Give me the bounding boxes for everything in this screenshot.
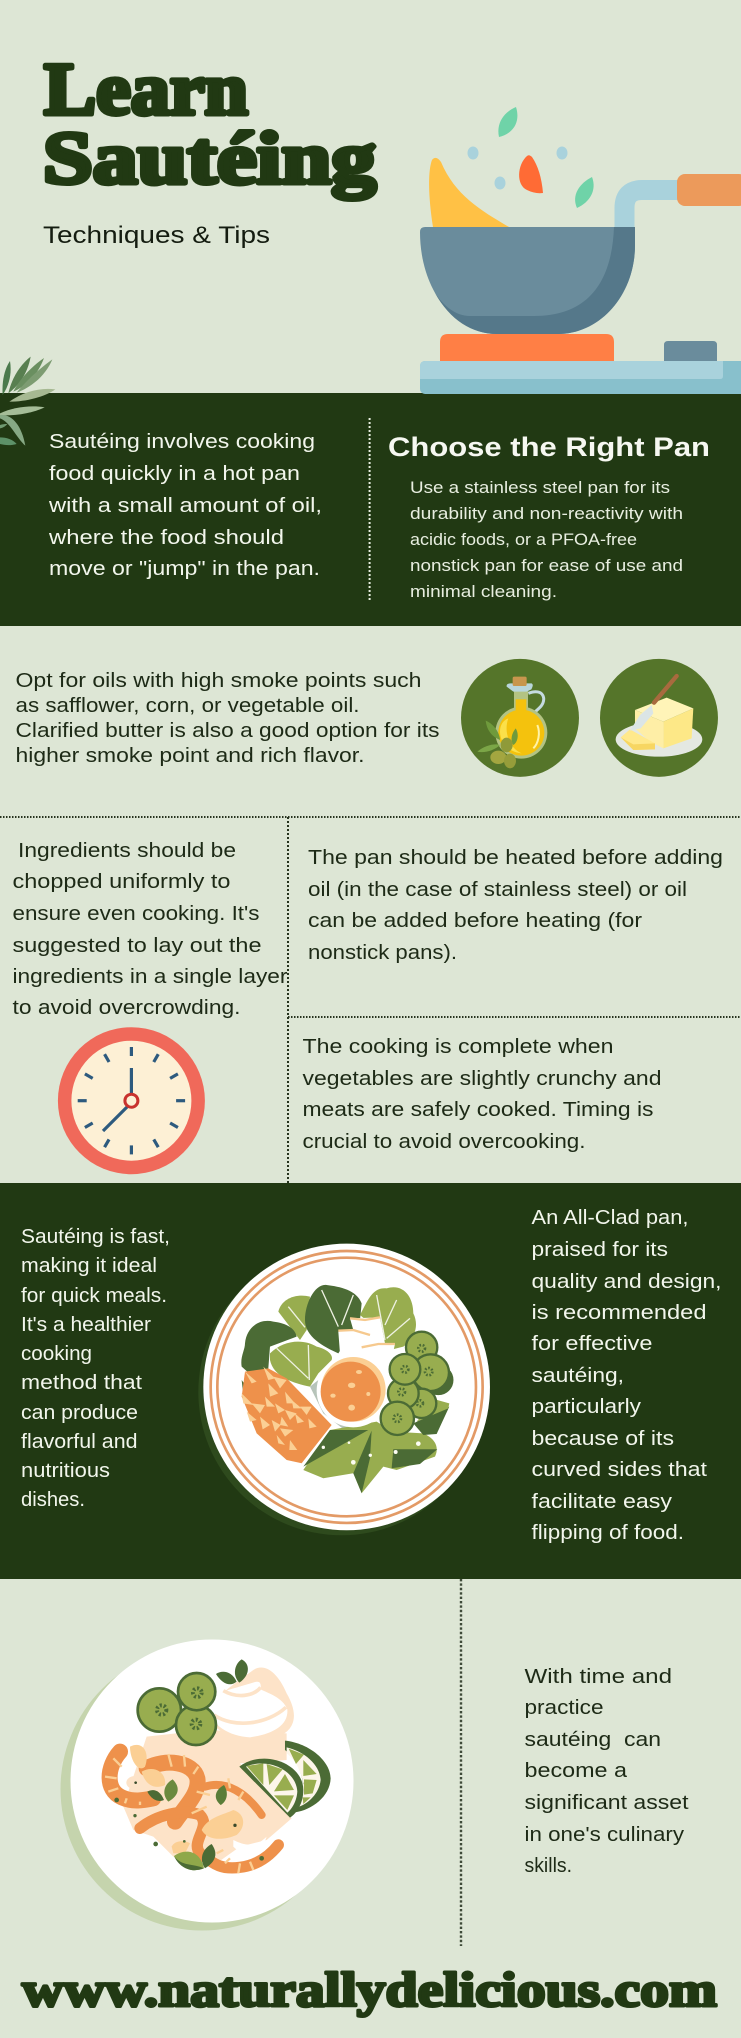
text block: All-Clad recommendation bbox=[532, 1207, 722, 1544]
text block: pan advice: durability and non-reactivity with bbox=[410, 504, 683, 523]
text block: definition of sautéing: food quickly in a hot pan bbox=[49, 463, 300, 485]
dotted grid dividers bbox=[0, 817, 741, 1183]
text block: All-Clad recommendation: curved sides that bbox=[532, 1459, 708, 1481]
text block: All-Clad recommendation: because of its bbox=[532, 1428, 674, 1450]
icon: butter on a plate bbox=[600, 659, 718, 777]
text block: oil choice: as safflower, corn, or vegetable oil. bbox=[16, 695, 360, 717]
text block: closing note: With time and bbox=[524, 1666, 672, 1688]
text block: pan advice: acidic foods, or a PFOA-free bbox=[410, 530, 637, 549]
text block: benefits of sautéing: cooking bbox=[21, 1343, 92, 1365]
text block: ingredients: ensure even cooking. It's bbox=[12, 903, 260, 925]
text block: All-Clad recommendation: flipping of food. bbox=[532, 1522, 684, 1544]
text block: benefits of sautéing: method that bbox=[21, 1372, 143, 1394]
text block: benefits of sautéing: dishes. bbox=[21, 1489, 85, 1511]
text block: definition of sautéing: where the food should bbox=[48, 527, 284, 549]
panel: intro band background bbox=[0, 393, 741, 626]
title bbox=[43, 49, 376, 200]
title: Sautéing bbox=[43, 118, 376, 200]
text block: oil choice bbox=[16, 670, 440, 767]
text block: heating the pan: can be added before heating (for bbox=[308, 910, 642, 932]
text block: doneness and timing: crucial to avoid overcooking. bbox=[302, 1131, 586, 1153]
icon: olive oil bottle bbox=[461, 659, 579, 777]
text block: definition of sautéing bbox=[48, 431, 322, 580]
text block: All-Clad recommendation: for effective bbox=[532, 1333, 652, 1355]
text block: doneness and timing: vegetables are slightly crunchy and bbox=[302, 1068, 662, 1090]
text block: All-Clad recommendation: praised for its bbox=[532, 1239, 668, 1261]
text block: doneness and timing: meats are safely cooked. Timing is bbox=[302, 1099, 654, 1121]
text block: heating the pan bbox=[308, 847, 723, 964]
text block: doneness and timing: The cooking is complete when bbox=[302, 1036, 614, 1058]
panel: second dark band background bbox=[0, 1183, 741, 1579]
text block: pan advice: minimal cleaning. bbox=[410, 582, 557, 601]
text block: oil choice: Clarified butter is also a good option for its bbox=[16, 720, 440, 742]
text block: oil choice: higher smoke point and rich flavor. bbox=[16, 745, 364, 767]
heading: choose the right pan: Choose the Right Pan bbox=[388, 432, 710, 462]
text block: ingredients: to avoid overcrowding. bbox=[12, 997, 240, 1019]
text block: ingredients bbox=[12, 840, 288, 1019]
footer website: www.naturallydelicious.com bbox=[22, 1962, 717, 2017]
text block: All-Clad recommendation: sautéing, bbox=[532, 1365, 624, 1387]
text block: benefits of sautéing bbox=[21, 1226, 170, 1511]
icon: clock bbox=[58, 1027, 205, 1174]
text block: All-Clad recommendation: particularly bbox=[532, 1396, 641, 1418]
text block: benefits of sautéing: Sautéing is fast, bbox=[21, 1226, 170, 1248]
title: Learn bbox=[44, 49, 248, 131]
text block: ingredients: Ingredients should be bbox=[18, 840, 236, 862]
text block: definition of sautéing: with a small amount of oil, bbox=[48, 495, 322, 517]
text block: benefits of sautéing: nutritious bbox=[21, 1460, 110, 1482]
text block: pan advice: Use a stainless steel pan for its bbox=[410, 478, 670, 497]
text block: benefits of sautéing: can produce bbox=[21, 1402, 138, 1424]
icon: pan on a stove bbox=[420, 107, 741, 394]
text block: benefits of sautéing: It's a healthier bbox=[21, 1314, 151, 1336]
text block: heating the pan: oil (in the case of stainless steel) or oil bbox=[308, 879, 687, 901]
illustration: plate of shrimp, cucumber and lime bbox=[60, 1640, 354, 1930]
text block: closing note: become a bbox=[524, 1760, 628, 1782]
text block: pan advice bbox=[410, 478, 683, 601]
text block: doneness and timing bbox=[302, 1036, 662, 1153]
text block: ingredients: ingredients in a single layer bbox=[12, 966, 288, 988]
text block: heating the pan: The pan should be heated before adding bbox=[308, 847, 723, 869]
text block: benefits of sautéing: flavorful and bbox=[21, 1431, 138, 1453]
text block: closing note: practice bbox=[524, 1697, 604, 1719]
text block: closing note bbox=[524, 1666, 689, 1877]
text block: All-Clad recommendation: is recommended bbox=[532, 1302, 706, 1324]
text block: closing note: significant asset bbox=[524, 1792, 689, 1814]
illustration: plate of greens and sauce bbox=[198, 1244, 490, 1535]
text block: benefits of sautéing: making it ideal bbox=[21, 1255, 157, 1277]
text block: ingredients: chopped uniformly to bbox=[12, 871, 230, 893]
subtitle: Techniques & Tips bbox=[43, 222, 270, 249]
text block: All-Clad recommendation: An All-Clad pan, bbox=[532, 1207, 688, 1229]
text block: closing note: skills. bbox=[524, 1855, 572, 1877]
icon: herb sprig bbox=[0, 357, 55, 446]
text block: benefits of sautéing: for quick meals. bbox=[21, 1285, 167, 1307]
text block: heating the pan: nonstick pans). bbox=[308, 942, 457, 964]
text block: All-Clad recommendation: facilitate easy bbox=[532, 1491, 672, 1513]
text block: closing note: in one's culinary bbox=[524, 1824, 684, 1846]
text block: oil choice: Opt for oils with high smoke points such bbox=[16, 670, 421, 692]
text block: ingredients: suggested to lay out the bbox=[12, 935, 262, 957]
text block: definition of sautéing: Sautéing involves cooking bbox=[49, 431, 315, 453]
text block: pan advice: nonstick pan for ease of use and bbox=[410, 556, 683, 575]
text block: closing note: sautéing can bbox=[524, 1729, 661, 1751]
text block: definition of sautéing: move or "jump" in the pan. bbox=[49, 558, 320, 580]
text block: All-Clad recommendation: quality and design, bbox=[532, 1271, 722, 1293]
